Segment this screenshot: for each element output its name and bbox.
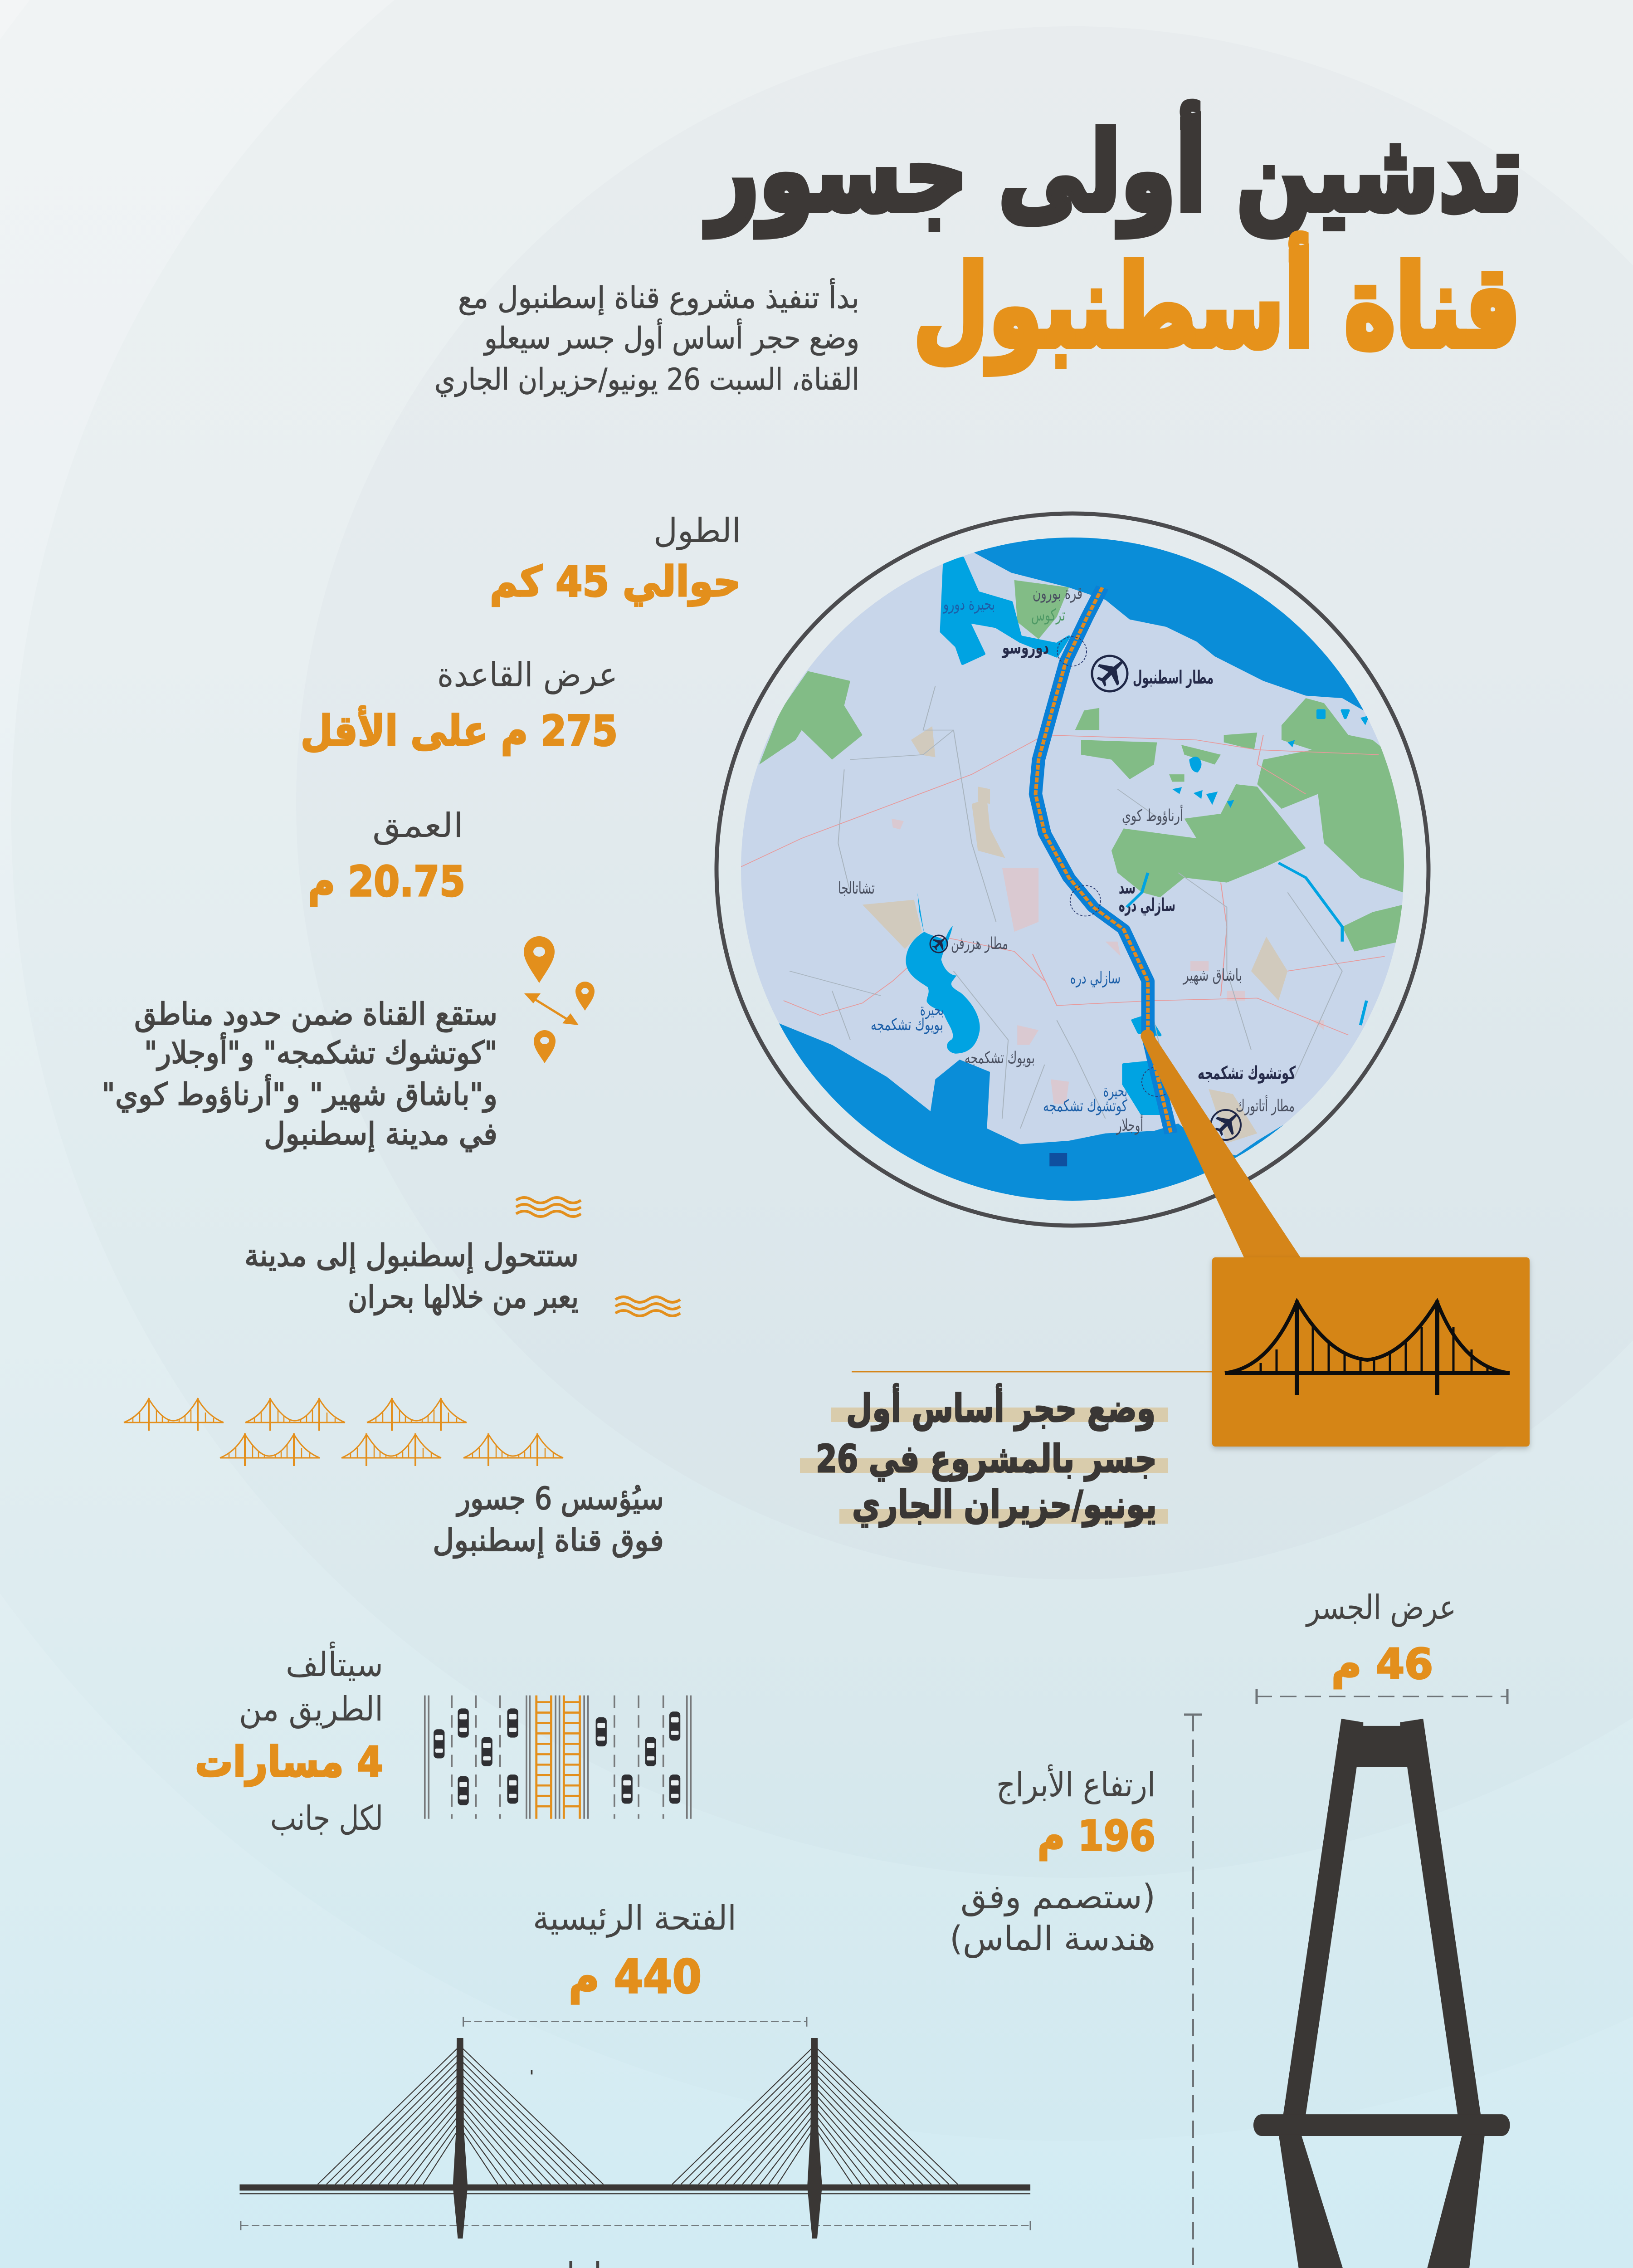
- map labels: مطار أتاتورك: [1236, 1095, 1295, 1115]
- map labels: دوروسو: [1002, 637, 1049, 658]
- text: six bridges: فوق قناة إسطنبول: [433, 1523, 664, 1559]
- Buyukcekmece lake: [906, 893, 980, 1054]
- stat: base width: [301, 655, 618, 756]
- map: canal route: [715, 512, 1430, 1227]
- stat: main span: [533, 1899, 736, 2004]
- map labels: بحيرة: [920, 1001, 944, 1019]
- map labels: كوتشوك تشكمجه: [1043, 1097, 1128, 1115]
- map labels: سد: [1119, 877, 1136, 898]
- map labels: مطار هزرفن: [951, 934, 1008, 953]
- height dimension line: [1184, 1714, 1202, 2268]
- icon: waves top: [516, 1198, 581, 1217]
- stat: length: [490, 511, 741, 606]
- callout: bridge location: [852, 1030, 1530, 1447]
- map labels: أرناؤوط كوي: [1122, 805, 1183, 825]
- stat: tower height: (ستصمم وفق: [960, 1877, 1155, 1916]
- stat: base width: 275 م على الأقل: [301, 706, 618, 756]
- stat: main span: الفتحة الرئيسية: [533, 1899, 736, 1938]
- map labels: باشاق شهير: [1183, 966, 1242, 985]
- map labels: بويوك تشكمجه: [965, 1049, 1035, 1067]
- stat: bridge width: [1256, 1588, 1508, 1704]
- towers and cables: [318, 2038, 604, 2239]
- roads: [741, 735, 1385, 1035]
- intro paragraph: القناة، السبت 26 يونيو/حزيران الجاري: [434, 362, 859, 397]
- map labels: مطار اسطنبول: [1133, 667, 1214, 688]
- icon: waves bottom: [615, 1297, 680, 1316]
- icon: location pins: [524, 936, 595, 1063]
- stat: bridge width: 46 م: [1331, 1640, 1433, 1689]
- diagram: road lanes: [425, 1696, 691, 1819]
- highlight bars: [800, 1408, 1168, 1524]
- map body: [741, 538, 1404, 1201]
- small ponds: [1172, 715, 1370, 808]
- green forests: [759, 580, 1406, 951]
- lane lines: [425, 1696, 691, 1819]
- title: [705, 102, 1523, 374]
- pointer: [1141, 1030, 1301, 1258]
- map labels: بحيرة دورو: [943, 595, 995, 614]
- text: foundation stone: وضع حجر أساس أول: [846, 1383, 1155, 1431]
- text: two seas: يعبر من خلالها بحران: [348, 1280, 579, 1315]
- map labels: سازلي دره: [1070, 969, 1121, 987]
- width dimension line: [1256, 1696, 1508, 1697]
- text: canal districts: و"باشاق شهير" و"أرناؤوط كوي": [102, 1074, 497, 1113]
- text: four lanes: سيتألف: [286, 1642, 383, 1684]
- text: canal districts: [102, 997, 497, 1152]
- map labels: أوجلار: [1116, 1114, 1143, 1135]
- text: six bridges: [433, 1481, 664, 1559]
- beige urban patches: [863, 726, 1287, 1143]
- diagram: bridge tower: [1253, 1719, 1510, 2268]
- total length dimension: [241, 2225, 1030, 2226]
- bridge circles: [1058, 637, 1172, 1096]
- sea: [779, 538, 1364, 1201]
- stat: tower height: [950, 1764, 1155, 1958]
- text: canal districts: في مدينة إسطنبول: [264, 1116, 497, 1152]
- map labels: تشاتالجا: [838, 879, 875, 898]
- stat: length: حوالي 45 كم: [490, 557, 741, 606]
- stat: bridge width: عرض الجسر: [1305, 1588, 1456, 1627]
- icon: airports: [930, 656, 1241, 1140]
- connector line: [852, 1371, 1212, 1373]
- cars: [434, 1729, 444, 1759]
- text: canal districts: "كوتشوك تشكمجه" و"أوجلار": [144, 1032, 497, 1071]
- stat: tower height: هندسة الماس): [950, 1919, 1155, 1958]
- map labels: كوتشوك تشكمجه: [1198, 1063, 1296, 1084]
- stat: depth: العمق: [372, 806, 463, 845]
- text: canal districts: ستقع القناة ضمن حدود مناطق: [134, 997, 497, 1032]
- diagram: cable-stayed bridge: [239, 2017, 1030, 2239]
- stat: depth: [308, 806, 465, 906]
- stat: base width: عرض القاعدة: [437, 655, 618, 694]
- map outer ring: [717, 513, 1428, 1226]
- text: four lanes: لكل جانب: [270, 1799, 383, 1838]
- stat: length: الطول: [653, 511, 741, 550]
- icon: suspension bridge: [1225, 1300, 1510, 1395]
- text: foundation stone: يونيو/حزيران الجاري: [852, 1482, 1157, 1527]
- text: six bridges: سيُؤسس 6 جسور: [456, 1481, 664, 1517]
- intro paragraph: بدأ تنفيذ مشروع قناة إسطنبول مع: [458, 278, 859, 316]
- sea marker: [1049, 1153, 1067, 1166]
- map labels: تركوس: [1031, 606, 1065, 625]
- text: four lanes: [195, 1642, 383, 1838]
- map labels: [838, 584, 1296, 1135]
- main span dimension: [463, 2021, 807, 2022]
- callout box: [1212, 1257, 1530, 1447]
- canal: [1035, 587, 1171, 1134]
- stat: depth: 20.75 م: [308, 857, 465, 906]
- stat: tower height: 196 م: [1038, 1812, 1155, 1861]
- text: foundation stone: [800, 1383, 1168, 1527]
- map labels: بحيرة: [1103, 1082, 1127, 1100]
- text: foundation stone: جسر بالمشروع في 26: [816, 1437, 1157, 1481]
- text: four lanes: 4 مسارات: [195, 1738, 383, 1786]
- text: two seas: ستتحول إسطنبول إلى مدينة: [244, 1238, 579, 1274]
- deck: [239, 2185, 1030, 2190]
- map labels: سازلي دره: [1119, 895, 1175, 916]
- map labels: بويوك تشكمجه: [871, 1016, 943, 1034]
- stat: tower height: ارتفاع الأبراج: [996, 1764, 1155, 1804]
- stat: main span: 440 م: [569, 1950, 702, 2004]
- text: four lanes: الطريق من: [239, 1690, 383, 1729]
- median ladders: [536, 1696, 580, 1819]
- icon: six bridges: [124, 1398, 563, 1466]
- map labels: قرة بورون: [1033, 584, 1082, 603]
- intro paragraph: [434, 278, 859, 397]
- text: two seas: [244, 1238, 579, 1315]
- lakes: [941, 558, 1348, 1114]
- intro paragraph: وضع حجر أساس أول جسر سيعلو: [483, 318, 859, 356]
